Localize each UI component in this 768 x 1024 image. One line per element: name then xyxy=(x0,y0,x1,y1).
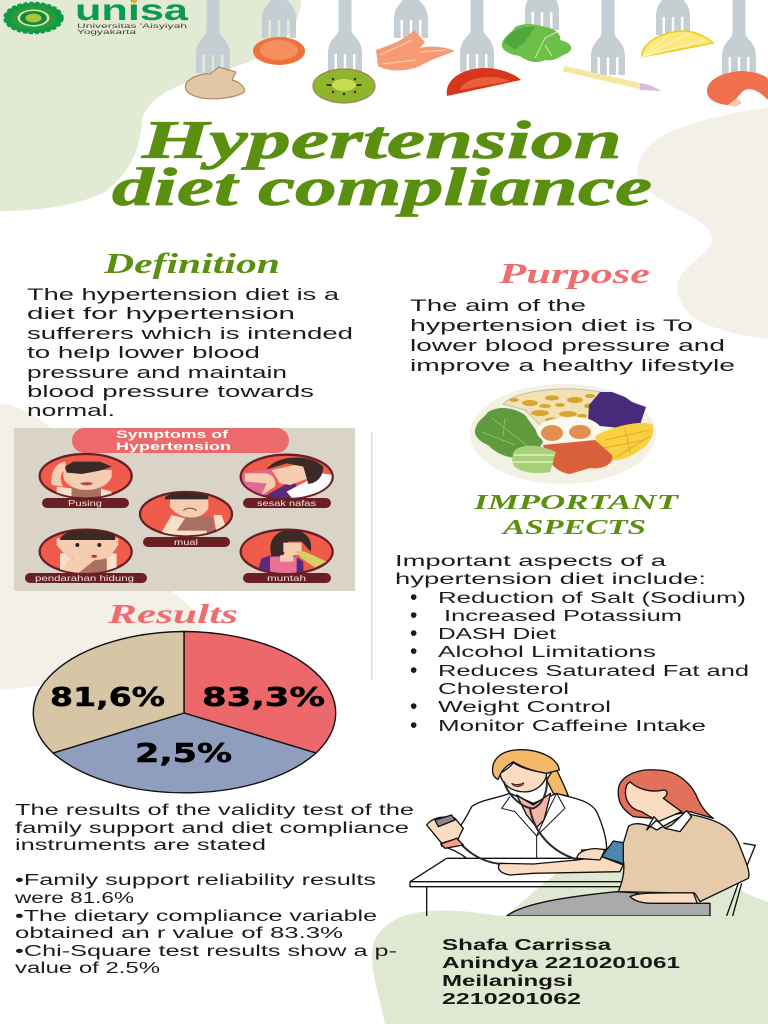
doctor ponytail xyxy=(548,771,569,796)
table xyxy=(410,858,627,916)
list: important aspects: Cholesterol xyxy=(438,681,569,698)
doctor shirt xyxy=(517,793,551,827)
text: important aspects intro: Important aspects of a xyxy=(395,553,667,570)
symptom label: muntah xyxy=(243,573,331,583)
forks row xyxy=(196,0,756,75)
text: purpose body: hypertension diet is To xyxy=(410,316,693,335)
list: important aspects: Alcohol Limitations xyxy=(438,644,656,661)
food: carrot slice xyxy=(253,37,305,65)
pie chart xyxy=(33,632,336,793)
symptom label: Pusing: Pusing xyxy=(68,498,102,508)
patient collar xyxy=(647,811,692,832)
text: results description: value of 2.5% xyxy=(15,960,160,977)
text: purpose body: lower blood pressure and xyxy=(410,336,725,355)
food: salmon xyxy=(376,30,455,70)
food: lettuce xyxy=(502,24,571,62)
list: important aspects: • xyxy=(410,622,417,645)
symptoms header pill: Symptoms of xyxy=(116,429,229,441)
patient arm xyxy=(498,857,623,875)
text: results description: obtained an r value of 83.3% xyxy=(15,925,343,942)
symptom: pusing xyxy=(40,454,132,500)
symptom: muntah xyxy=(241,530,333,575)
list: important aspects: Increased Potassium xyxy=(444,608,682,625)
logo: UNISA wordmark: Yogyakarta xyxy=(77,29,137,36)
text: authors: 2210201062 xyxy=(442,991,581,1008)
symptom label: pendarahan hidung xyxy=(25,573,147,583)
doctor hand on arm xyxy=(577,849,605,860)
symptom label: mual xyxy=(143,537,230,547)
list: important aspects: • xyxy=(410,659,417,682)
logo: UNISA wordmark: Universitas 'Aisyiyah xyxy=(77,23,188,30)
text: results description: The results of the validity test of the xyxy=(15,802,414,819)
logo: UNISA wordmark xyxy=(75,0,188,36)
blood pressure cuff xyxy=(602,840,624,864)
text: results description: •Chi-Square test results show a p- xyxy=(15,943,397,960)
text: definition body: blood pressure towards xyxy=(27,382,314,401)
heading: Results: Results xyxy=(106,599,238,629)
stethoscope xyxy=(458,776,579,865)
heading: Important Aspects xyxy=(472,490,680,539)
text: definition body: The hypertension diet is a xyxy=(27,285,340,304)
symptoms header pill: Hypertension xyxy=(116,441,231,453)
text: results description: instruments are stated xyxy=(15,837,266,854)
list: important aspects: Reduces Saturated Fat and xyxy=(438,663,749,680)
food: shrimp xyxy=(707,71,768,107)
heading: Definition: Definition xyxy=(103,248,280,280)
text: definition body: sufferers which is intended xyxy=(27,324,353,343)
text: results description: •Family support reliability results xyxy=(15,872,376,889)
panel: symptoms of hypertension xyxy=(14,428,355,591)
symptom: pendarahan hidung xyxy=(40,529,132,574)
food: asparagus stick xyxy=(562,66,661,91)
illustration: food plate xyxy=(470,384,656,484)
food: mushroom xyxy=(185,67,244,99)
doctor hand with gauge xyxy=(427,817,463,843)
title: diet compliance xyxy=(112,157,652,217)
logo: university emblem xyxy=(4,3,62,33)
doctor coat xyxy=(442,793,607,858)
list: important aspects: Monitor Caffeine Intake xyxy=(438,718,706,735)
patient face xyxy=(625,782,682,822)
text: definition body: normal. xyxy=(27,401,115,420)
pie chart: 83,3% xyxy=(202,683,325,713)
background blob: top left green xyxy=(0,0,301,211)
text: results description: were 81.6% xyxy=(14,890,134,907)
heading: Important Aspects: ASPECTS xyxy=(500,515,646,539)
doctor face xyxy=(500,763,547,792)
food: lemon wedge xyxy=(642,31,713,57)
illustration: doctor measuring patient blood pressure xyxy=(410,750,755,916)
symptom label: sesak nafas xyxy=(243,498,331,508)
text: important aspects intro: hypertension diet include: xyxy=(395,571,706,588)
symptom label: muntah: muntah xyxy=(267,573,306,583)
food: tomato wedge xyxy=(447,68,521,96)
list: important aspects: Weight Control xyxy=(438,699,611,716)
symptom label: Pusing xyxy=(42,498,129,508)
list: important aspects: • xyxy=(410,586,417,609)
title: Hypertension xyxy=(140,110,622,170)
patient hand on lap xyxy=(630,893,697,903)
symptom label: sesak nafas: sesak nafas xyxy=(257,498,316,508)
food: kiwi xyxy=(313,69,375,103)
text: authors: Meilaningsi xyxy=(442,973,573,990)
doctor hair xyxy=(493,750,559,779)
doctor lapels xyxy=(502,793,565,858)
vertical divider xyxy=(371,432,372,680)
chair xyxy=(727,843,755,916)
patient sweater xyxy=(618,813,749,902)
patient hair xyxy=(618,770,713,818)
list: important aspects: • xyxy=(410,714,417,737)
list: important aspects: • xyxy=(410,695,417,718)
text: results description: •The dietary compliance variable xyxy=(15,908,377,925)
text: authors: Shafa Carrissa xyxy=(442,937,611,954)
text: authors: Anindya 2210201061 xyxy=(442,955,680,972)
symptom: mual xyxy=(140,492,232,537)
pie chart: 81,6% xyxy=(50,683,165,713)
symptom: sesak nafas xyxy=(241,455,333,500)
background blob: right beige xyxy=(638,107,768,339)
text: purpose body: improve a healthy lifestyle xyxy=(410,356,735,375)
background blob: bottom right green xyxy=(372,863,768,1024)
list: important aspects xyxy=(410,586,749,737)
text: definition body xyxy=(27,285,353,420)
text: results description: family support and diet compliance xyxy=(15,820,409,837)
symptom label: pendarahan hidung: pendarahan hidung xyxy=(35,573,134,583)
text: important aspects intro xyxy=(395,553,706,588)
text: definition body: pressure and maintain xyxy=(27,363,287,382)
symptom label: mual: mual xyxy=(174,537,198,547)
background blob: left beige xyxy=(0,403,201,690)
patient pants xyxy=(507,892,710,916)
text: definition body: to help lower blood xyxy=(27,343,260,362)
text: purpose body xyxy=(410,296,735,375)
symptoms header pill xyxy=(72,428,289,453)
text: authors xyxy=(442,937,680,1008)
list: important aspects: DASH Diet xyxy=(438,626,557,643)
list: important aspects: • xyxy=(410,640,417,663)
heading: Purpose: Purpose xyxy=(497,258,650,290)
title xyxy=(112,110,652,217)
heading: Important Aspects: IMPORTANT xyxy=(472,490,680,514)
symptom illustrations xyxy=(40,454,333,575)
list: important aspects: • xyxy=(410,604,417,627)
text: purpose body: The aim of the xyxy=(410,296,586,315)
text: definition body: diet for hypertension xyxy=(27,304,295,323)
list: important aspects: Reduction of Salt (Sodium) xyxy=(438,590,746,607)
pie chart: 2,5% xyxy=(135,739,232,769)
text: results description xyxy=(14,802,414,977)
